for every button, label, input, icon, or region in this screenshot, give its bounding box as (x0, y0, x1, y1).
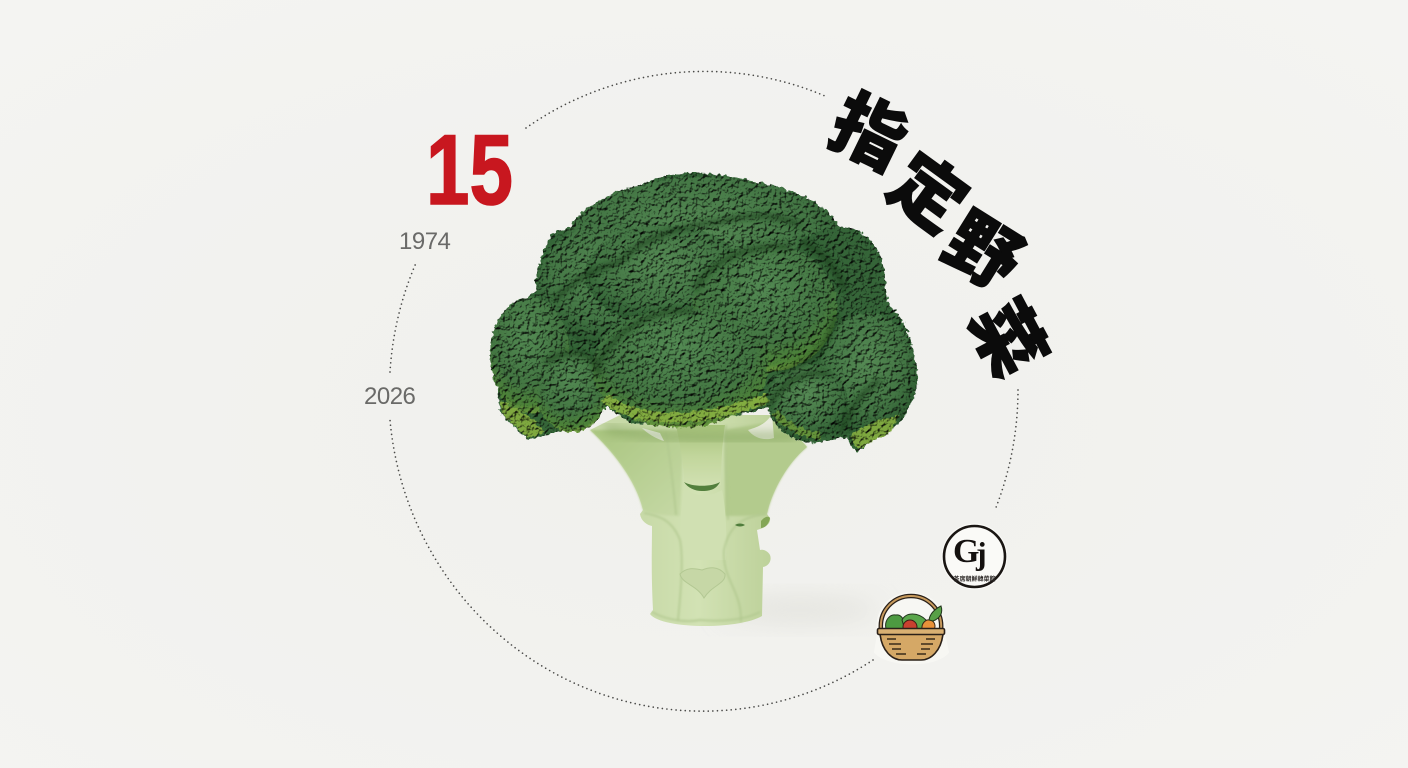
floret: lower right (768, 364, 848, 440)
ground shadow (720, 598, 880, 622)
title: 指定野菜: 定 (870, 125, 992, 253)
title: 指定野菜: 指 (815, 64, 927, 192)
title: 指定野菜 (815, 64, 1076, 393)
logo badge (942, 524, 1008, 590)
floret: upper left (538, 223, 682, 347)
logo letters: G (953, 533, 979, 570)
broccoli stem (590, 414, 807, 626)
crown creases (545, 216, 880, 435)
dotted circular ring (390, 71, 1018, 711)
broccoli illustration (490, 173, 917, 626)
stem node marks (684, 482, 720, 491)
crown shadow on stem (605, 428, 795, 438)
year 2026: 2026 (364, 383, 416, 410)
gaps under crown (642, 428, 664, 441)
floret: middle (585, 225, 745, 325)
floret: right (820, 313, 916, 437)
vegetable basket icon (876, 594, 947, 662)
broccoli crown (490, 173, 917, 453)
floret: edge left (500, 400, 545, 438)
number 15: 15 (426, 114, 513, 225)
floret: front (592, 308, 768, 428)
title: 指定野菜: 菜 (948, 279, 1076, 393)
title: 指定野菜: 野 (927, 183, 1045, 311)
floret: left (490, 297, 570, 413)
front floret yellow fringe (605, 398, 768, 418)
basket bowl (880, 634, 943, 660)
basket vegetables (886, 615, 905, 629)
floret: upper right (785, 228, 885, 332)
year 1974: 1974 (399, 228, 451, 255)
logo caption: 茶席朝鮮韓菜館 (953, 574, 996, 583)
floret: upper crown (565, 177, 845, 313)
logo badge: j (975, 535, 987, 571)
floret: edge right (850, 415, 900, 450)
floret: lower left (536, 352, 608, 432)
floret: centre right (693, 244, 837, 372)
